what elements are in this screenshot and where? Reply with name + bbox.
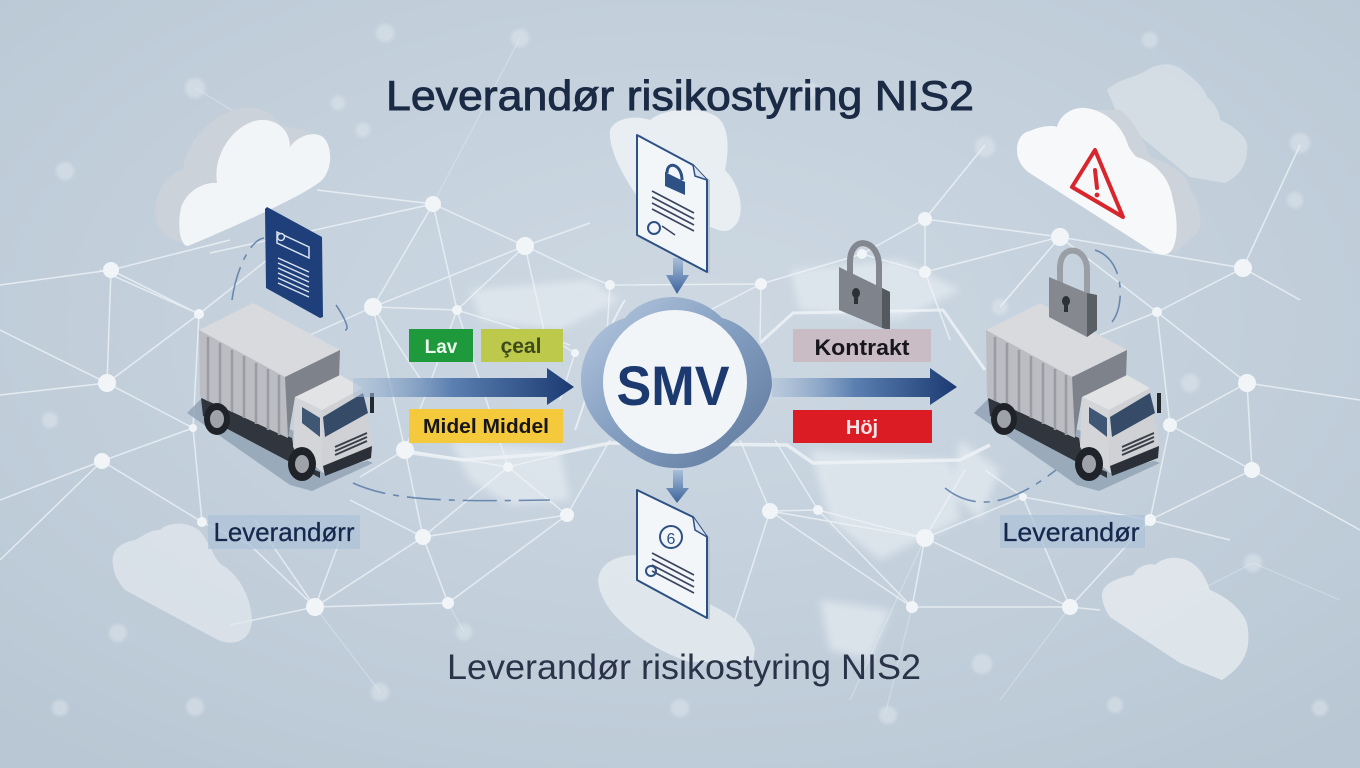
- icon: padlock centre: [839, 243, 890, 330]
- label: Kontrakt: [793, 329, 931, 362]
- risk label: ceal: [481, 329, 563, 362]
- icon: navy document: [265, 207, 323, 318]
- label: Höj: Höj: [846, 417, 878, 439]
- truck: right supplier: [974, 303, 1161, 491]
- cloud: top centre: [610, 109, 741, 231]
- cloud: bottom left: [113, 524, 252, 643]
- label: left supplier: Leverandørr: [214, 517, 355, 547]
- route lines: [405, 300, 990, 463]
- SMV hub: [581, 297, 772, 468]
- icon: padlock on truck: [1049, 251, 1097, 337]
- label: Kontrakt: Kontrakt: [814, 335, 910, 360]
- icon: warning triangle: [1072, 150, 1123, 217]
- arrow: SMV down to document: [666, 470, 689, 503]
- dashed orbit arcs: [232, 238, 1120, 502]
- cloud with warning sign: [1017, 108, 1200, 254]
- world map backdrop: [450, 260, 1000, 660]
- icon: bottom document: [637, 490, 710, 620]
- risk label: Midel Middel: Midel Middel: [423, 416, 549, 438]
- truck: left supplier: [187, 303, 374, 491]
- icon: bottom document: 6: [667, 531, 676, 548]
- lock glyph: [665, 165, 685, 195]
- cloud: back right: [1107, 64, 1247, 183]
- risk label: Lav: [409, 329, 473, 362]
- title: Leverandør risikostyring NIS2: [386, 72, 974, 119]
- network of connections: [0, 145, 1360, 625]
- cloud: bottom centre: [598, 555, 755, 662]
- cloud: bottom right: [1102, 558, 1248, 680]
- label: Höj: [793, 410, 932, 443]
- SMV text: SMV: [616, 354, 730, 417]
- network nodes: [94, 196, 1260, 616]
- risk label: Lav: Lav: [425, 337, 458, 358]
- arrow: supplier to SMV: [353, 368, 574, 405]
- subtitle: Leverandør risikostyring NIS2: [447, 648, 921, 687]
- label: right supplier: Leverandør: [1002, 517, 1140, 547]
- icon: locked document: [637, 135, 710, 274]
- arrow: SMV to supplier: [772, 368, 957, 405]
- risk label: Midel Middel: [409, 409, 563, 443]
- cloud: top left: [155, 108, 330, 246]
- arrow: document down into SMV: [666, 258, 689, 294]
- risk label: ceal: çeal: [501, 335, 541, 358]
